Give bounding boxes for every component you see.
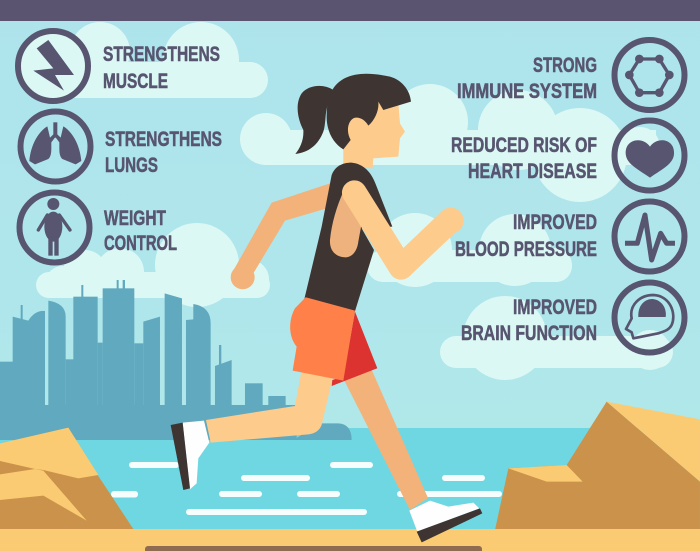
ponytail: [295, 86, 333, 154]
arm hole skin: [330, 192, 362, 257]
label: strong immune system: STRONG: [533, 54, 597, 77]
upper body: [231, 74, 464, 386]
label: reduced risk of heart disease: [451, 134, 597, 183]
benefit: strong immune system: [457, 40, 684, 110]
label: strong immune system: IMMUNE SYSTEM: [457, 80, 597, 103]
label: strengthens muscle: [103, 43, 220, 93]
cloud: by hand: [367, 213, 572, 287]
label: weight control: CONTROL: [104, 232, 177, 255]
face and neck: [343, 97, 405, 168]
benefit: strengthens muscle: [18, 31, 220, 101]
left rock: [0, 428, 134, 530]
cloud: behind head: [240, 84, 660, 202]
benefit: improved blood pressure: [455, 202, 684, 272]
benefit: reduced risk of heart disease: [451, 120, 684, 190]
brown bottom bar: [145, 546, 482, 551]
label: improved blood pressure: [455, 211, 597, 261]
front leg and shoe: [342, 366, 482, 542]
city skyline: [0, 280, 352, 440]
cloud: lower right: [440, 296, 673, 380]
label: weight control: WEIGHT: [104, 207, 166, 230]
icon: molecule ring: [614, 40, 684, 110]
label: strengthens muscle: MUSCLE: [103, 70, 168, 93]
benefit: improved brain function: [461, 282, 684, 352]
rear leg and shoe: [171, 370, 333, 490]
front arm: [354, 193, 464, 267]
water: [0, 428, 700, 530]
sand ground: [0, 529, 700, 551]
icon: pulse: [614, 202, 684, 272]
shorts: [290, 297, 377, 386]
label: strengthens lungs: STRENGTHENS: [105, 128, 222, 151]
cloud: top left: [18, 22, 268, 98]
benefit: weight control: [20, 192, 177, 262]
icon: lungs: [20, 112, 90, 182]
label: weight control: [104, 207, 177, 255]
water ripples: [111, 462, 502, 515]
label: reduced risk of heart disease: HEART DISEASE: [468, 160, 597, 183]
label: improved blood pressure: BLOOD PRESSURE: [455, 238, 597, 261]
icon: muscle bolt: [18, 31, 88, 101]
vest: [303, 163, 392, 317]
benefit: strengthens lungs: [20, 112, 222, 182]
icon: overweight person: [20, 192, 90, 262]
label: improved blood pressure: IMPROVED: [513, 211, 597, 234]
cloud: lower left: [36, 223, 270, 307]
label: strong immune system: [457, 54, 597, 103]
hair: [327, 74, 411, 149]
label: strengthens lungs: LUNGS: [105, 154, 158, 177]
label: improved brain function: [461, 296, 597, 345]
back arm: [231, 183, 330, 289]
label: strengthens lungs: [105, 128, 222, 177]
label: improved brain function: BRAIN FUNCTION: [461, 322, 597, 345]
icon: heart: [614, 120, 684, 190]
label: improved brain function: IMPROVED: [513, 296, 597, 319]
label: strengthens muscle: STRENGTHENS: [103, 43, 220, 66]
right rock: [495, 402, 700, 530]
icon: head with brain: [614, 282, 684, 352]
top bar: [0, 0, 700, 21]
runner: [171, 74, 482, 542]
label: reduced risk of heart disease: REDUCED RISK OF: [451, 134, 597, 157]
